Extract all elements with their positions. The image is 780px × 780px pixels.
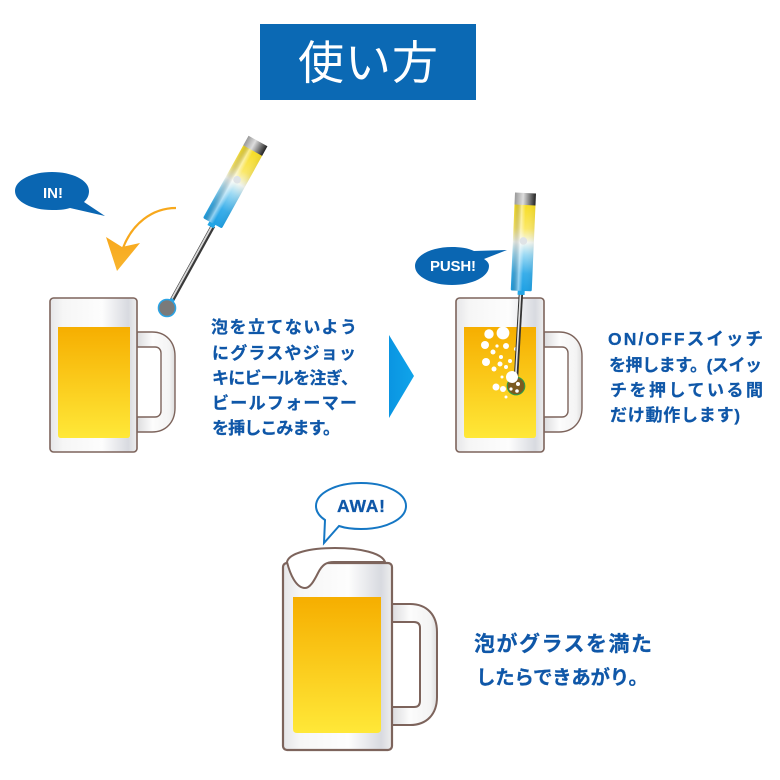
arrow: into mug	[106, 208, 176, 271]
text block: step 2: を押します。(スイッ	[609, 356, 762, 375]
text block: step 1: キにビールを注ぎ、	[212, 368, 358, 388]
arrow: next step	[389, 335, 414, 418]
text block: step 1: にグラスやジョッ	[212, 343, 356, 363]
text block: step 1: を挿しこみます。	[212, 419, 340, 438]
speech bubble: IN!	[15, 172, 105, 216]
bubbles	[481, 327, 518, 398]
foamer head	[158, 300, 176, 316]
text block: step 3	[474, 632, 652, 689]
text block: step 3: したらできあがり。	[476, 666, 648, 689]
text block: step 1: 泡を立てないよう	[211, 318, 357, 337]
foamer head with bubbles	[506, 371, 525, 395]
title: 使い方	[298, 37, 438, 89]
mug with foam and beer	[283, 548, 437, 750]
text block: step 1: ビールフォーマー	[212, 393, 357, 413]
panel: step 2	[415, 193, 763, 452]
panel: step 3	[283, 483, 652, 750]
text block: step 2: ON/OFFスイッチ	[608, 329, 763, 349]
mug with beer	[50, 298, 175, 452]
panel: step 1	[15, 136, 358, 452]
mug with beer	[456, 298, 582, 452]
text block: step 2: だけ動作します)	[610, 406, 740, 425]
icon: beer foamer tilted	[158, 136, 267, 316]
speech bubble: AWA!	[316, 483, 406, 543]
speech bubble: IN!: IN!	[43, 185, 63, 202]
text block: step 3: 泡がグラスを満た	[474, 632, 652, 656]
speech bubble: PUSH!: PUSH!	[430, 258, 476, 275]
icon: beer foamer in mug	[506, 193, 536, 395]
text block: step 1	[211, 318, 358, 438]
text block: step 2: チを押している間	[610, 381, 763, 400]
speech bubble: PUSH!	[415, 247, 507, 285]
speech bubble: AWA!: AWA!	[337, 496, 385, 516]
foam	[287, 548, 385, 588]
title	[260, 24, 476, 100]
text block: step 2	[608, 329, 763, 425]
